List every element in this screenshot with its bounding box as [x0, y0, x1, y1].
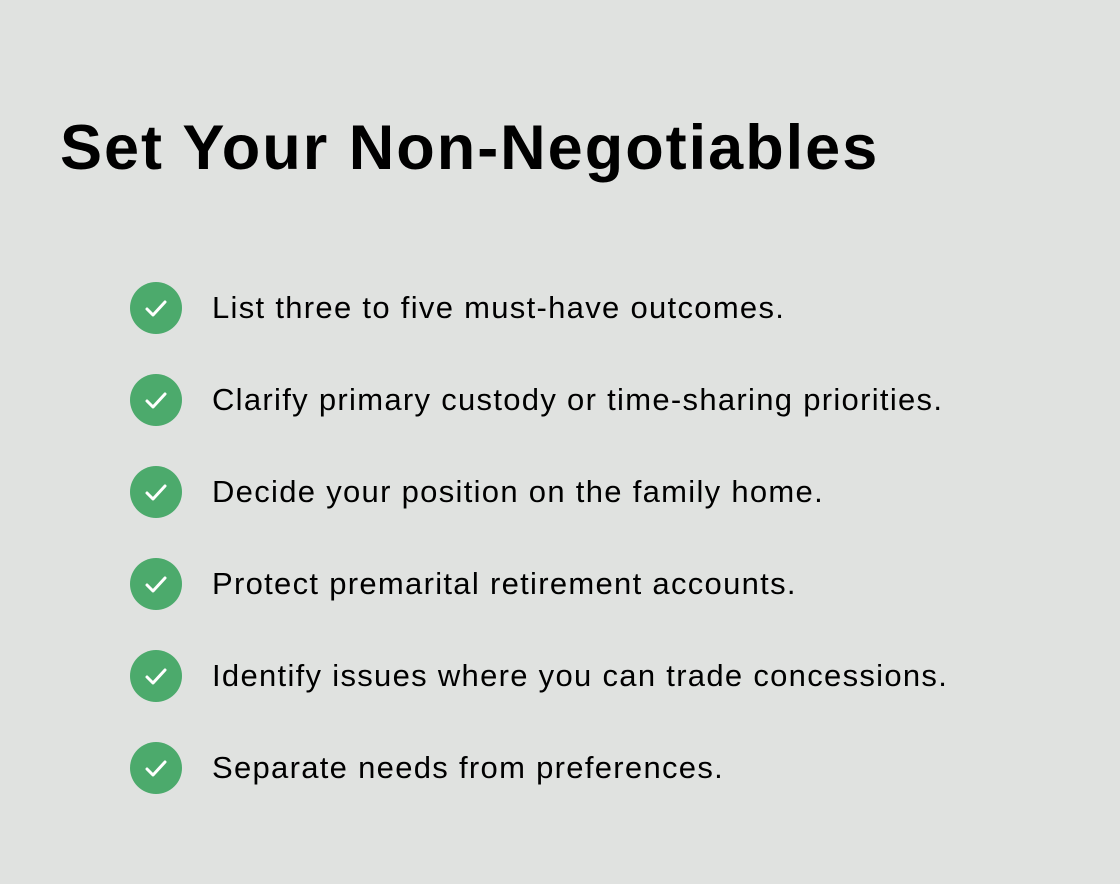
item 6: Separate needs from preferences. [212, 750, 724, 785]
item 5: Identify issues where you can trade concessions. [212, 658, 948, 693]
item 5 [130, 650, 948, 702]
item 2: Clarify primary custody or time-sharing priorities. [212, 382, 943, 417]
title: Set Your Non-Negotiables [60, 113, 879, 183]
item 3: Decide your position on the family home. [212, 474, 824, 509]
item 1: List three to five must-have outcomes. [212, 290, 785, 325]
item 2 [130, 374, 943, 426]
item 6 [130, 742, 724, 794]
item 1 [130, 282, 785, 334]
item 4: Protect premarital retirement accounts. [212, 566, 797, 601]
item 3 [130, 466, 824, 518]
item 4 [130, 558, 797, 610]
checklist [130, 282, 948, 794]
